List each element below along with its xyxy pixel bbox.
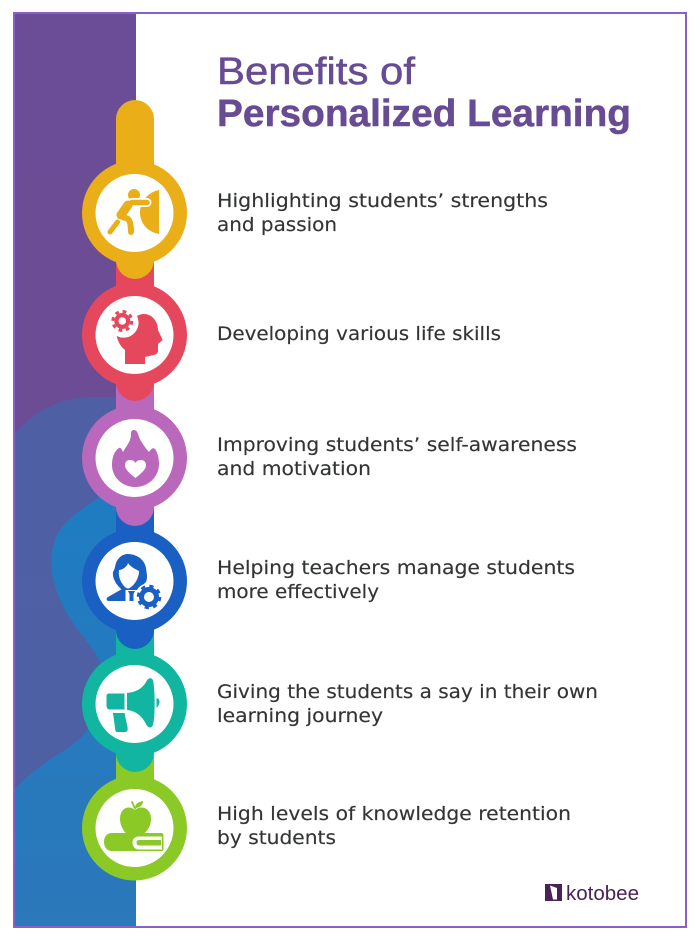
icon: person pushing wall [110,189,159,234]
step 2: red badge [82,282,187,401]
title [217,51,631,135]
icon: teacher with gear [107,554,163,611]
step 1: yellow badge [82,160,187,279]
text: benefit 3: and motivation [217,458,371,480]
icon: apple on book [104,801,164,851]
step 6: green badge [82,776,187,880]
text: benefit 3 [217,434,577,480]
text: benefit 1: and passion [217,214,337,236]
step 4: blue badge [82,528,187,649]
text: benefit 1 [217,190,548,236]
text: benefit 3: Improving students’ self-awareness [217,434,577,456]
text: benefit 1: Highlighting students’ strengths [217,190,548,212]
icon: head with gear [113,312,163,364]
step 3: purple badge [82,406,187,526]
text: benefit 4: more effectively [217,581,379,603]
text: benefit 6: by students [217,827,336,849]
panel: left gradient column [14,13,136,927]
text: benefit 4 [217,557,575,603]
text: benefit 6: High levels of knowledge retention [217,803,571,825]
text: benefit 5: Giving the students a say in their own [217,681,598,703]
icon: flame with heart [112,430,159,487]
title: Personalized Learning [217,93,631,135]
icon: megaphone [106,678,160,732]
text: benefit 5: learning journey [217,705,383,727]
text: benefit 2: Developing various life skills [217,323,501,345]
text: benefit 6 [217,803,571,849]
title: Benefits of [217,51,415,93]
text: benefit 5 [217,681,598,727]
step 5: teal badge [82,652,187,772]
timeline stems [116,100,154,803]
logo: kotobee: kotobee [566,883,639,905]
text: benefit 4: Helping teachers manage students [217,557,575,579]
